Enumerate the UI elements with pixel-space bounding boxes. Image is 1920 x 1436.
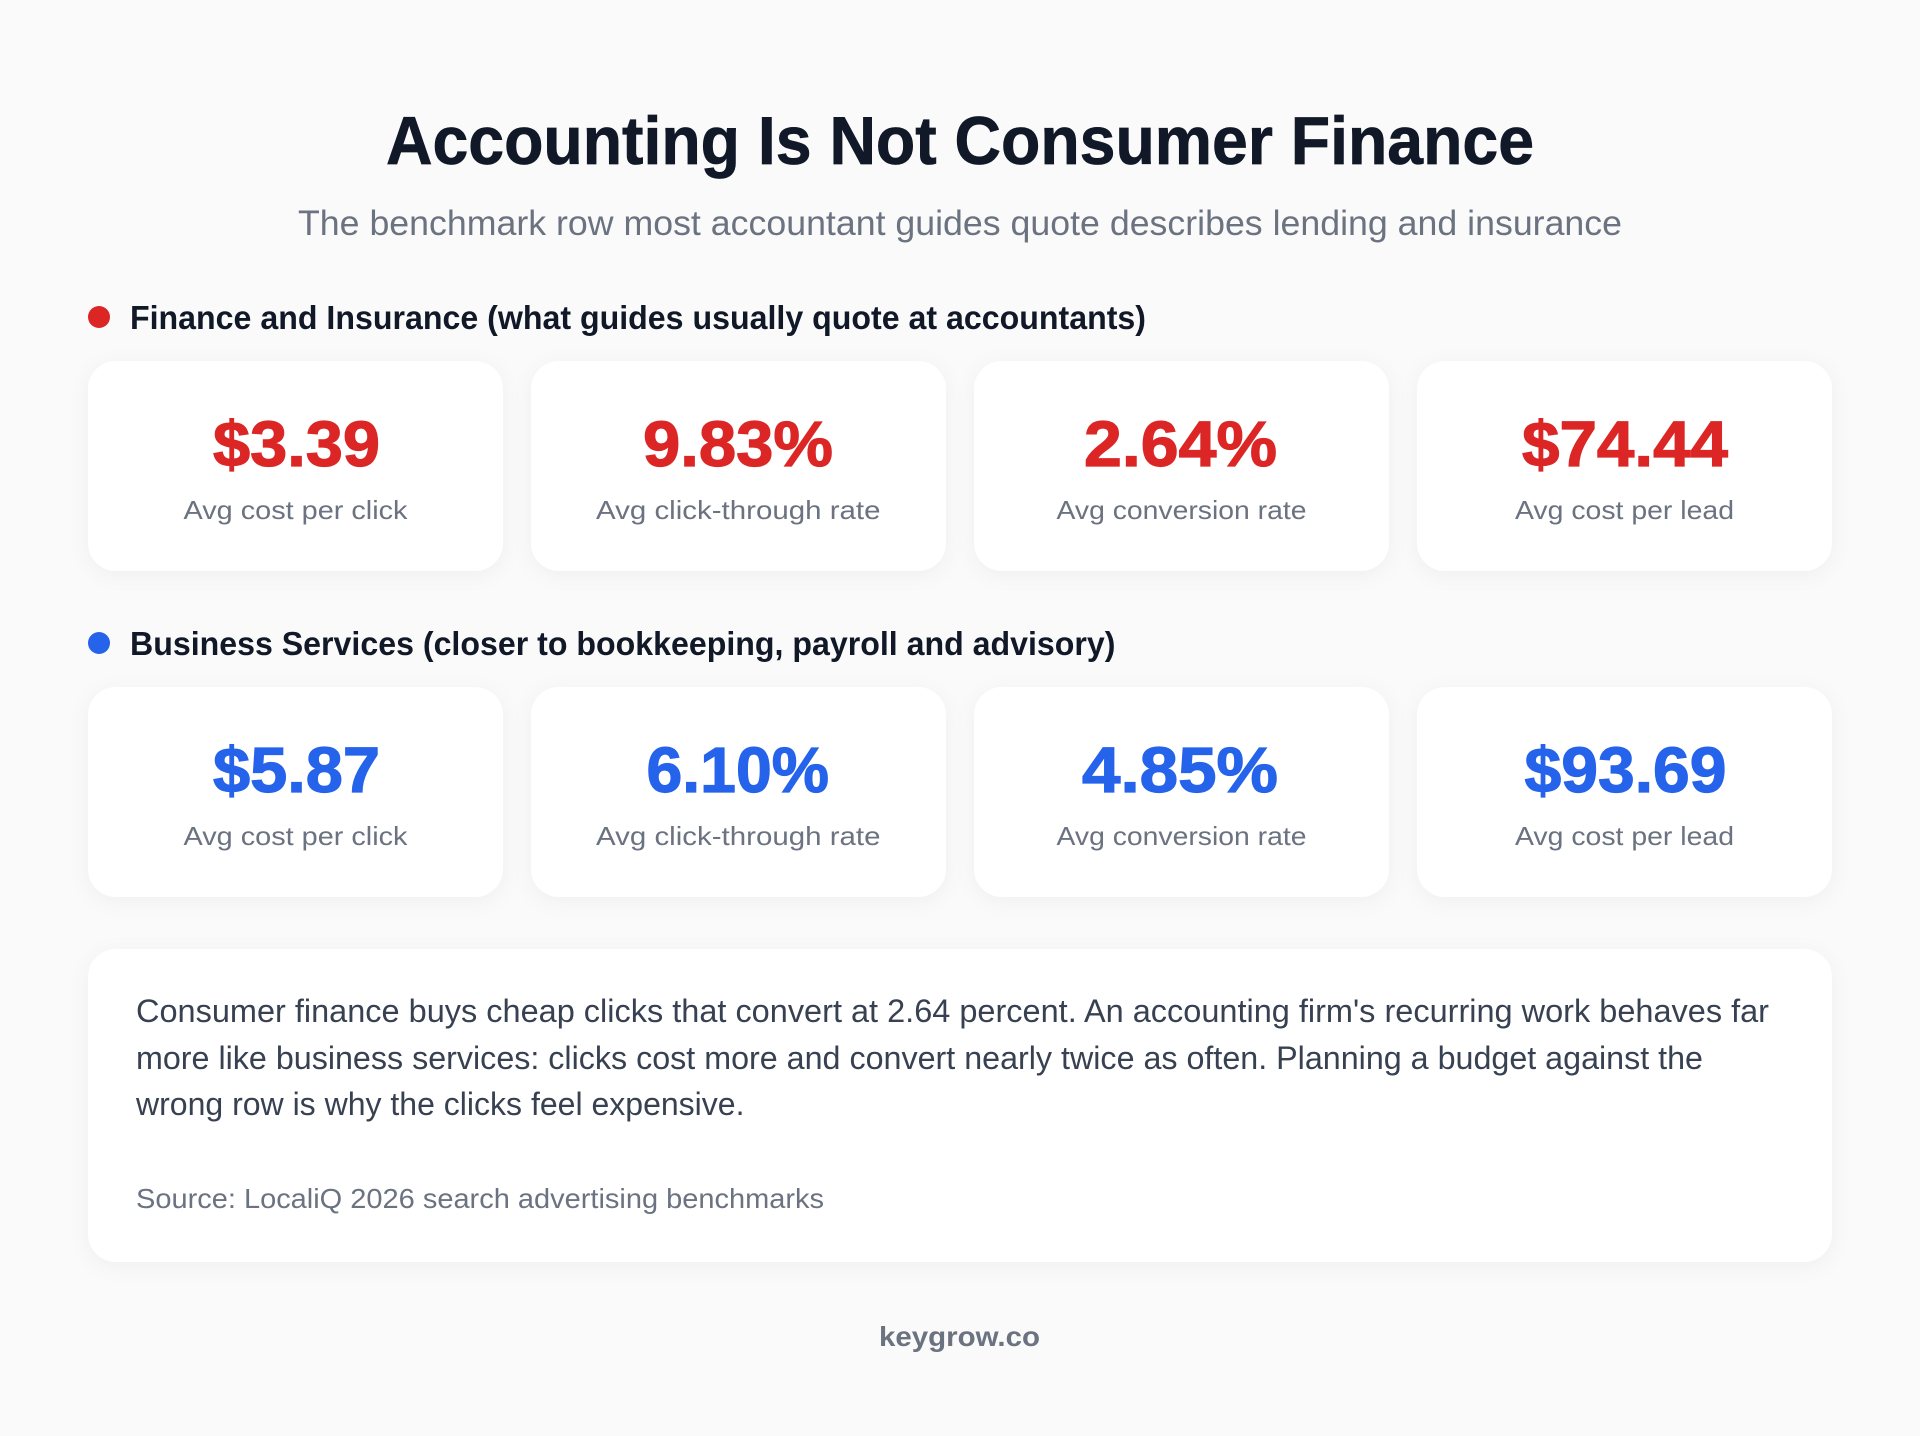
note text — [135, 993, 1769, 1122]
footer brand: keygrow.co — [879, 1321, 1040, 1352]
source line: Source: LocaliQ 2026 search advertising benchmarks — [136, 1183, 824, 1214]
card: finance conversion rate: Avg conversion rate — [1056, 495, 1306, 525]
card: business conversion rate: 4.85% — [1082, 734, 1278, 806]
heading text: finance and insurance: Finance and Insurance (what guides usually quote at accountants) — [130, 299, 1146, 336]
subtitle: The benchmark row most accountant guides quote describes lending and insurance — [298, 204, 1622, 243]
card: finance cost per click: Avg cost per click — [184, 495, 409, 525]
card: business click-through rate: 6.10% — [646, 734, 829, 806]
card: finance conversion rate: 2.64% — [1084, 408, 1277, 480]
card: finance click-through rate: Avg click-through rate — [596, 495, 880, 525]
section: business services — [88, 625, 1832, 897]
card: finance cost per lead: Avg cost per lead — [1515, 495, 1734, 525]
panel: takeaway note — [88, 949, 1832, 1262]
card: finance conversion rate — [974, 361, 1389, 571]
card: business cost per lead: $93.69 — [1524, 734, 1726, 806]
title: Accounting Is Not Consumer Finance — [386, 103, 1534, 179]
heading text: business services: Business Services (closer to bookkeeping, payroll and advisory) — [130, 625, 1116, 662]
card: business conversion rate: Avg conversion rate — [1056, 821, 1306, 851]
card: business cost per click: $5.87 — [213, 734, 380, 806]
section: finance and insurance — [88, 299, 1832, 571]
card: finance cost per click — [88, 361, 503, 571]
card: finance click-through rate — [531, 361, 946, 571]
card: business cost per lead — [1417, 687, 1832, 897]
card: finance click-through rate: 9.83% — [643, 408, 833, 480]
section heading: finance and insurance — [88, 299, 1146, 336]
card: business cost per click — [88, 687, 503, 897]
card: business conversion rate — [974, 687, 1389, 897]
card: business cost per lead: Avg cost per lead — [1515, 821, 1734, 851]
card: finance cost per lead — [1417, 361, 1832, 571]
note text: Consumer finance buys cheap clicks that convert at 2.64 percent. An accounting firm's recurring work behaves far — [136, 993, 1769, 1029]
note text: more like business services: clicks cost more and convert nearly twice as often. Planning a budget against the — [136, 1040, 1703, 1076]
icon: blue dot — [88, 632, 110, 654]
card: business click-through rate: Avg click-through rate — [596, 821, 880, 851]
card: business cost per click: Avg cost per click — [184, 821, 409, 851]
note text: wrong row is why the clicks feel expensive. — [135, 1086, 745, 1122]
card: business click-through rate — [531, 687, 946, 897]
icon: red dot — [88, 306, 110, 328]
section heading: business services — [88, 625, 1116, 662]
card: finance cost per lead: $74.44 — [1522, 408, 1728, 480]
card: finance cost per click: $3.39 — [213, 408, 380, 480]
